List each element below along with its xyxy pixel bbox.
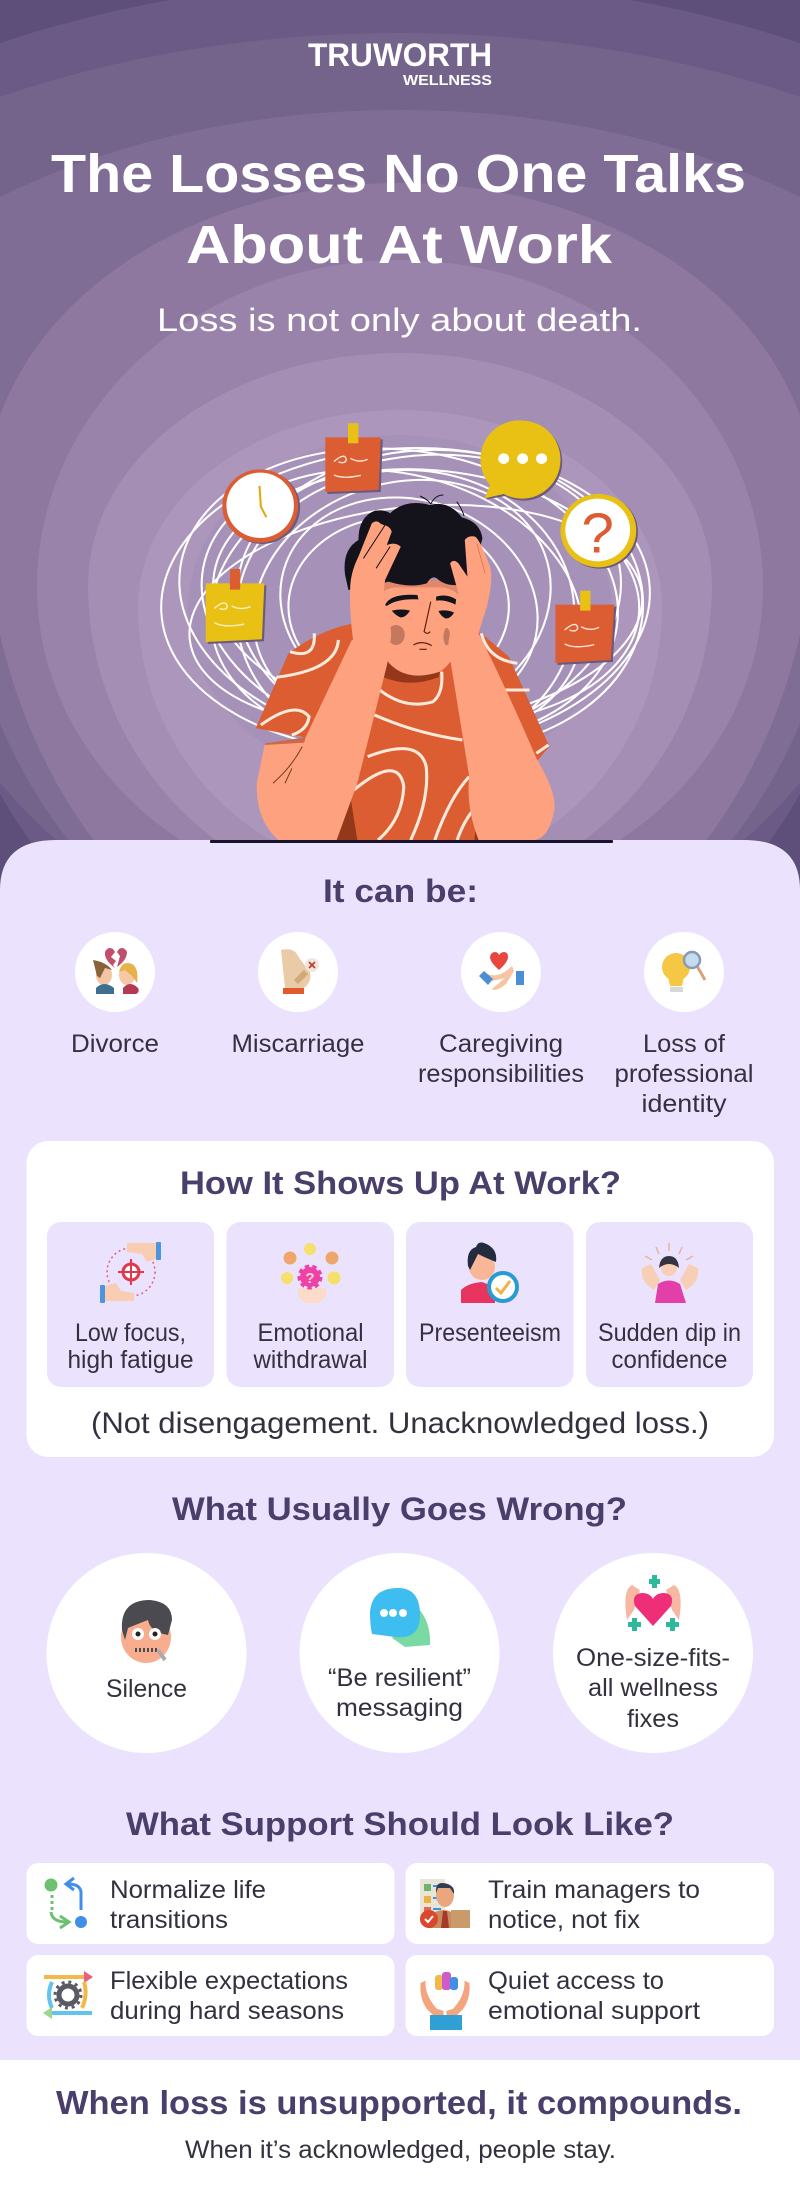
item: one-size-fits-all wellness fixes: all wellness — [588, 1674, 718, 1702]
item: loss of professional identity: identity — [642, 1090, 727, 1118]
scribble lines — [153, 422, 658, 781]
sticky note: right — [555, 591, 616, 665]
item: loss of professional identity: professional — [614, 1060, 754, 1088]
item: one-size-fits-all wellness fixes — [553, 1553, 753, 1753]
head — [345, 495, 482, 683]
card: presenteeism: Presenteeism — [419, 1319, 561, 1347]
sticky note: top — [325, 423, 383, 494]
hair — [345, 503, 482, 590]
item: one-size-fits-all wellness fixes: fixes — [627, 1705, 679, 1733]
speech bubble — [480, 420, 562, 501]
note: (Not disengagement. Unacknowledged loss.) — [91, 1407, 709, 1440]
card: sudden dip in confidence — [586, 1222, 753, 1387]
item: be resilient messaging — [300, 1553, 500, 1753]
card: low focus: high fatigue — [68, 1346, 194, 1374]
card: flexible expectations: during hard seasons — [110, 1997, 344, 2025]
card: normalize life transitions: transitions — [110, 1906, 228, 1934]
heading: What Support Should Look Like? — [126, 1806, 674, 1842]
card: presenteeism — [406, 1222, 574, 1387]
card: normalize life transitions — [26, 1863, 394, 1944]
desk line — [210, 840, 613, 843]
shirt — [256, 623, 549, 840]
question mark badge — [560, 494, 638, 569]
hero background — [0, 0, 800, 889]
card: sudden dip in confidence: Sudden dip in — [598, 1319, 741, 1347]
card: low focus — [47, 1222, 214, 1387]
item: miscarriage: Miscarriage — [232, 1030, 364, 1058]
panel: how it shows up at work — [26, 1141, 774, 1457]
item: caregiving: responsibilities — [418, 1060, 584, 1088]
main lavender panel — [0, 840, 800, 2060]
card: sudden dip in confidence: confidence — [612, 1346, 728, 1374]
sticky note: left — [206, 569, 266, 644]
footer — [0, 2060, 800, 2189]
heading: It can be: — [323, 873, 478, 909]
brows — [385, 595, 456, 606]
heading: What Usually Goes Wrong? — [172, 1491, 627, 1527]
item: one-size-fits-all wellness fixes: One-size-fits- — [576, 1644, 730, 1672]
nose and mouth — [413, 602, 432, 649]
card: emotional withdrawal: Emotional — [258, 1319, 364, 1347]
item: caregiving: Caregiving — [439, 1030, 563, 1058]
item: loss of professional identity: Loss of — [643, 1030, 725, 1058]
item: miscarriage — [232, 932, 364, 1058]
face — [383, 580, 458, 678]
card: flexible expectations: Flexible expectations — [110, 1967, 348, 1995]
item: caregiving — [418, 932, 584, 1088]
item: divorce — [71, 932, 159, 1058]
closing headline: When loss is unsupported, it compounds. — [56, 2084, 742, 2121]
card: train managers: notice, not fix — [488, 1906, 641, 1934]
closing line: When it’s acknowledged, people stay. — [185, 2136, 616, 2164]
card: emotional withdrawal: withdrawal — [253, 1346, 368, 1374]
hands — [350, 521, 491, 647]
card: quiet access: emotional support — [488, 1997, 700, 2025]
item: divorce: Divorce — [71, 1030, 159, 1058]
logo: WELLNESS — [403, 72, 492, 89]
card: emotional withdrawal — [226, 1222, 394, 1387]
logo — [308, 37, 492, 89]
man — [256, 495, 555, 840]
card: low focus: Low focus, — [75, 1319, 186, 1347]
illustration: stressed man with scribbles and notes — [153, 420, 658, 840]
card: train managers: Train managers to — [488, 1876, 700, 1904]
card: flexible expectations — [26, 1955, 394, 2036]
item: loss of professional identity — [614, 932, 754, 1118]
subtitle: Loss is not only about death. — [157, 302, 642, 338]
left arm — [257, 640, 392, 840]
section: what support should look like — [26, 1806, 774, 2036]
item: silence: Silence — [106, 1675, 187, 1703]
question mark badge: ? — [581, 502, 614, 565]
card: quiet access: Quiet access to — [488, 1967, 664, 1995]
clock — [222, 469, 300, 544]
card: train managers — [406, 1863, 774, 1944]
section: what usually goes wrong — [46, 1491, 753, 1753]
title: About At Work — [186, 215, 613, 275]
card: quiet access — [406, 1955, 774, 2036]
item: be resilient messaging: messaging — [336, 1694, 463, 1722]
item: silence — [46, 1553, 246, 1753]
right arm — [449, 633, 555, 840]
section: it can be — [71, 873, 754, 1118]
title — [51, 144, 746, 275]
card: emotional withdrawal: ? — [305, 1270, 315, 1287]
eyes — [392, 609, 410, 617]
title: The Losses No One Talks — [51, 144, 746, 204]
item: be resilient messaging: “Be resilient” — [328, 1664, 471, 1692]
logo: TRUWORTH — [308, 37, 492, 73]
heading: How It Shows Up At Work? — [180, 1165, 621, 1201]
card: normalize life transitions: Normalize life — [110, 1876, 266, 1904]
